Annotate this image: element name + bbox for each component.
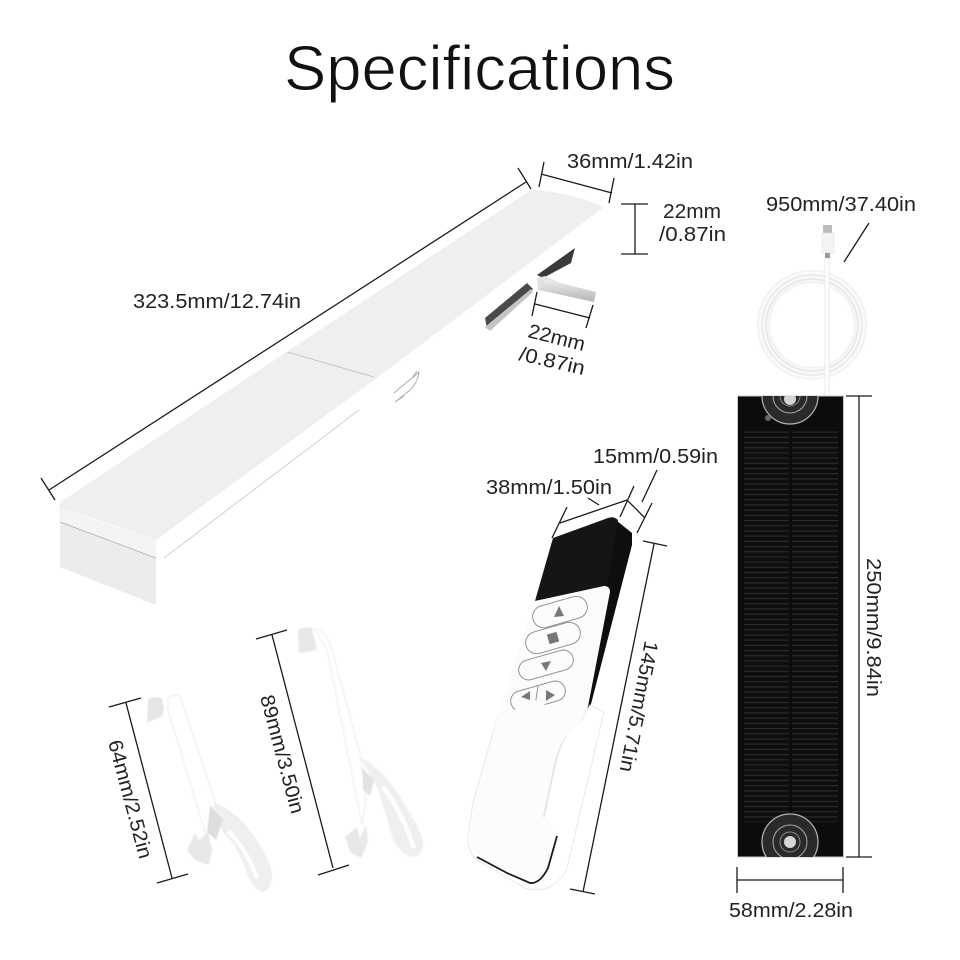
clip outer shell (468, 705, 604, 890)
panel cells (744, 430, 838, 822)
clip top hook (147, 697, 164, 723)
dimension: remote depth (593, 446, 718, 533)
dimension: panel height (846, 396, 884, 857)
dimension: bar width: 36mm/1.42in (567, 151, 693, 173)
bar shaft (537, 276, 596, 302)
clip handle (213, 802, 272, 892)
bar front panel (60, 522, 156, 605)
usb plug (822, 225, 834, 258)
dimension: remote length (570, 541, 667, 894)
remote front white (490, 586, 610, 815)
dimension: remote depth: 15mm/0.59in (593, 446, 718, 468)
clip top hook (298, 627, 317, 653)
dimension: short clip (103, 698, 188, 883)
cable lead (825, 258, 829, 398)
product: usb cable (758, 194, 916, 398)
bottom suction cup (761, 813, 819, 857)
remote clip (468, 700, 604, 890)
product: long clip (298, 627, 423, 858)
dimension: remote width (486, 477, 634, 538)
title: Specifications (284, 34, 675, 104)
clip bottom hook (187, 832, 212, 865)
button stop (523, 620, 583, 656)
clip body (314, 629, 366, 825)
dimension: long clip (255, 630, 349, 875)
remote side black (578, 517, 632, 724)
clip front cover (470, 700, 582, 880)
product: motor bar (59, 190, 604, 605)
dimension: remote length: 145mm/5.71in (615, 639, 662, 774)
dimension: panel width: 58mm/2.28in (729, 900, 853, 922)
button down (516, 648, 576, 682)
clip handle (360, 757, 423, 857)
bar top face (59, 190, 604, 540)
product: short clip (147, 695, 272, 892)
dimension: short clip: 64mm/2.52in (103, 738, 156, 861)
dimension: bar length (41, 168, 531, 500)
cable coil (758, 271, 866, 379)
button left right (508, 679, 568, 713)
dimension: bar height (621, 201, 726, 254)
remote top black (535, 517, 618, 601)
buttons (508, 594, 590, 713)
dimension: panel height: 250mm/9.84in (862, 558, 884, 697)
dimension: bar width (539, 151, 693, 203)
button up (530, 594, 590, 630)
clip body (168, 695, 215, 835)
bar hand icon (394, 371, 419, 402)
product: solar panel (738, 368, 844, 870)
dimension: shaft length: /0.87in (517, 343, 587, 380)
dimension: bar height: /0.87in (659, 224, 726, 246)
dimension: shaft length: 22mm (526, 321, 587, 356)
cable label and leader (766, 194, 916, 262)
dimension: remote width: 38mm/1.50in (486, 477, 612, 499)
product: remote control (468, 517, 632, 890)
clip fork (207, 805, 223, 840)
cable label and leader: 950mm/37.40in (766, 194, 916, 216)
panel body (738, 396, 844, 857)
top suction cup (761, 396, 819, 425)
dimension: long clip: 89mm/3.50in (255, 693, 308, 816)
clip black edge (477, 836, 557, 883)
dimension: bar length: 323.5mm/12.74in (133, 291, 301, 313)
clip fork (362, 768, 374, 796)
dimension: panel width (729, 867, 853, 922)
dimension: bar height: 22mm (663, 201, 721, 223)
dimension: shaft length (517, 292, 593, 380)
bar slot (485, 248, 575, 331)
clip bottom hook (345, 825, 368, 858)
